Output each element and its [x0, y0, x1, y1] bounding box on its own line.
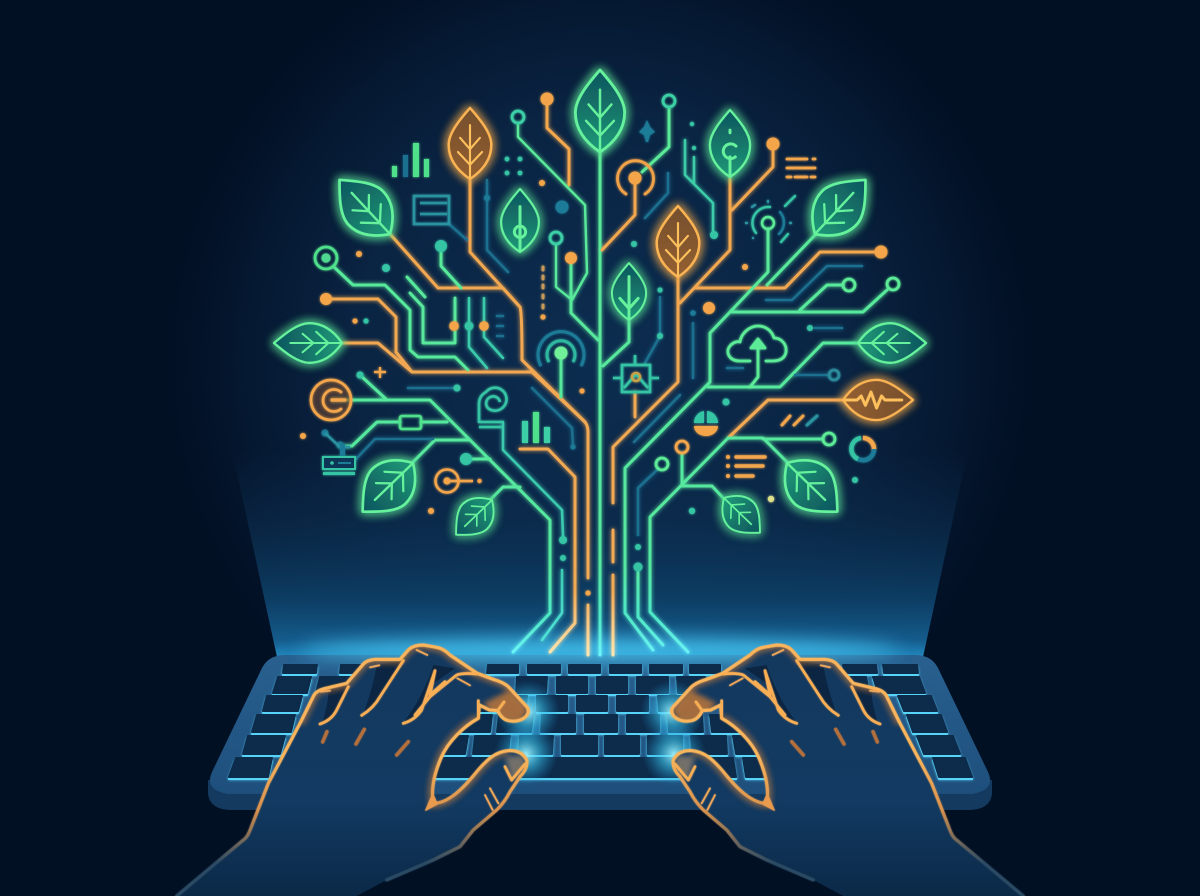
open ring nodes [512, 95, 899, 470]
leaf: upper mid left with ring [501, 189, 539, 252]
keyboard top edge light [275, 656, 925, 658]
keyboard top edge glow [300, 637, 900, 663]
leaf: top centre [575, 70, 625, 152]
icon: orange signal arc [618, 161, 654, 194]
icon: sparkle diamond [639, 120, 655, 142]
leaf: far left [274, 323, 342, 363]
trunk: teal branches [469, 140, 713, 640]
pale yellow node [768, 496, 774, 502]
fingertip glow left thumb [494, 722, 558, 786]
leaf: upper right diagonal [797, 164, 883, 250]
trunk: centre green line [598, 150, 602, 655]
dotted line [542, 267, 544, 308]
trunk: orange branches [326, 105, 876, 655]
keyboard [208, 637, 992, 810]
fingertip glow left index [496, 680, 560, 744]
right hand [672, 645, 1023, 896]
leaf: orange far right with pulse [843, 380, 913, 420]
green and teal nodes [356, 122, 858, 572]
leaf: top right with coil [710, 110, 750, 177]
icon: control panel [323, 433, 355, 475]
leaf: lower right [770, 446, 854, 529]
icon: resistor box [400, 416, 421, 429]
icons [311, 120, 874, 492]
leaf: upper left diagonal [322, 164, 408, 250]
icon: donut chart [851, 438, 874, 460]
icon: chat box [414, 196, 449, 224]
leaf: orange top left [449, 108, 491, 179]
leaves: orange [449, 108, 913, 420]
icon: plus [374, 367, 386, 378]
light projection cone [232, 450, 968, 657]
leaf: lower right small [712, 485, 772, 545]
icon: spiral hook [479, 388, 506, 427]
icon: pie chart [694, 411, 718, 436]
icon: orange coil ring [311, 380, 351, 420]
fingertip glow right thumb [642, 722, 706, 786]
keyboard bottom light bar [470, 792, 730, 794]
icon: bar chart centre [522, 412, 550, 443]
leaf: centre small [612, 263, 646, 320]
icon: cloud upload [728, 326, 786, 387]
leaf: lower left small [444, 487, 504, 547]
dim background traces [355, 173, 862, 535]
trunk: green branches [332, 107, 887, 652]
leaf: orange centre right [657, 206, 699, 277]
circuit lines [326, 105, 887, 655]
dim nodes [322, 195, 696, 450]
leaf: far right [858, 323, 926, 363]
icon: bar chart top left [392, 143, 429, 177]
icon: target ring left [315, 247, 337, 269]
icon: concentric signal [538, 332, 584, 366]
icon: teal slash [807, 416, 817, 425]
keyboard base lip [208, 780, 992, 810]
fingertip glow right index [640, 680, 704, 744]
leaf: lower left [346, 446, 430, 529]
icon: list lines [726, 455, 765, 478]
keys: dark caps [229, 665, 972, 777]
leaves: green [274, 70, 926, 547]
node dots [300, 92, 899, 596]
illustration: circuit tree over keyboard [174, 0, 1026, 896]
icon: radar [746, 196, 795, 242]
icon: orange target with pin [436, 470, 482, 492]
icon: chip square [613, 355, 659, 392]
keyboard top surface [210, 655, 990, 794]
background glow behind tree [100, 0, 1100, 800]
orange nodes [300, 92, 888, 596]
icon: orange slashes [782, 416, 803, 425]
icon: orange menu lines [787, 159, 815, 177]
left hand [177, 645, 528, 896]
keys: glowing under-edge [229, 667, 972, 779]
